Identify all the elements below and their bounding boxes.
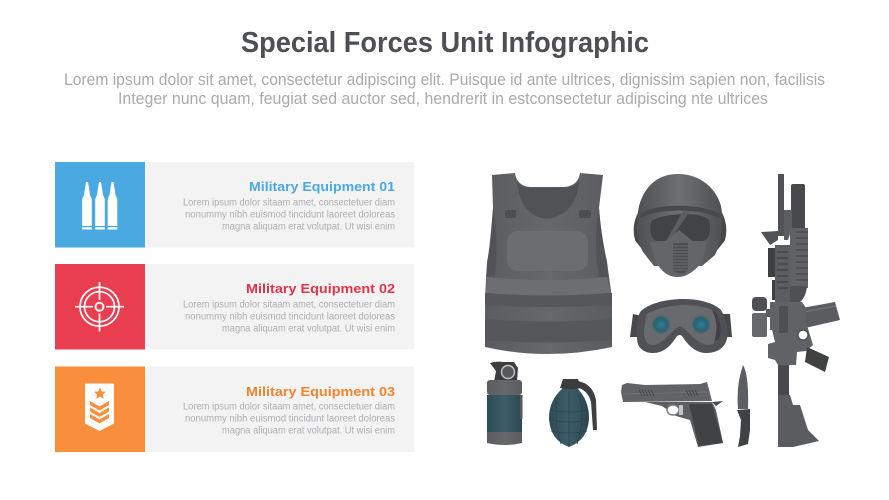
body text 01 (183, 198, 395, 232)
panel: military equipment 03 (55, 366, 414, 452)
body text 01: magna aliquam erat volutpat. Ut wisi enim (222, 222, 395, 232)
body text 01: Lorem ipsum dolor sitaam amet, consectetuer diam (183, 198, 395, 208)
body text 02: magna aliquam erat volutpat. Ut wisi enim (222, 324, 395, 334)
illustration: assault rifle (752, 174, 840, 447)
illustration: smoke grenade (487, 362, 522, 445)
icon: three bullets (82, 182, 117, 230)
heading 02: Military Equipment 02 (246, 281, 395, 296)
heading 03: Military Equipment 03 (246, 384, 395, 399)
title: Special Forces Unit Infographic (241, 27, 649, 59)
icon: crosshair target (75, 282, 124, 332)
body text 02: Lorem ipsum dolor sitaam amet, consectetuer diam (183, 300, 395, 310)
subtitle text: Lorem ipsum dolor sit amet, consectetur adipiscing elit. Puisque id ante ultrices, dignissim sapien non, facilisis (64, 71, 825, 89)
panel: military equipment 02 (55, 264, 414, 350)
illustration: frag grenade (549, 379, 597, 447)
illustration: tactical vest (485, 173, 612, 354)
subtitle text (64, 71, 825, 108)
body text 01: nonummy nibh euismod tincidunt laoreet doloreas (185, 210, 395, 220)
body text 03 (183, 402, 395, 436)
body text 03: magna aliquam erat volutpat. Ut wisi enim (222, 426, 395, 436)
illustration: helmet with mask (635, 174, 725, 277)
body text 03: Lorem ipsum dolor sitaam amet, consectetuer diam (183, 402, 395, 412)
panel: military equipment 01 (55, 162, 414, 248)
icon: rank badge (85, 384, 114, 431)
body text 02 (183, 300, 395, 334)
subtitle text: Integer nunc quam, feugiat sed auctor sed, hendrerit in estconsectetur adipiscing nte ultrices (118, 90, 768, 108)
body text 03: nonummy nibh euismod tincidunt laoreet doloreas (185, 414, 395, 424)
body text 02: nonummy nibh euismod tincidunt laoreet doloreas (185, 312, 395, 322)
illustration: goggles (630, 299, 732, 353)
illustration: combat knife (737, 365, 750, 447)
heading 01: Military Equipment 01 (249, 179, 395, 194)
illustration: pistol (621, 382, 723, 447)
